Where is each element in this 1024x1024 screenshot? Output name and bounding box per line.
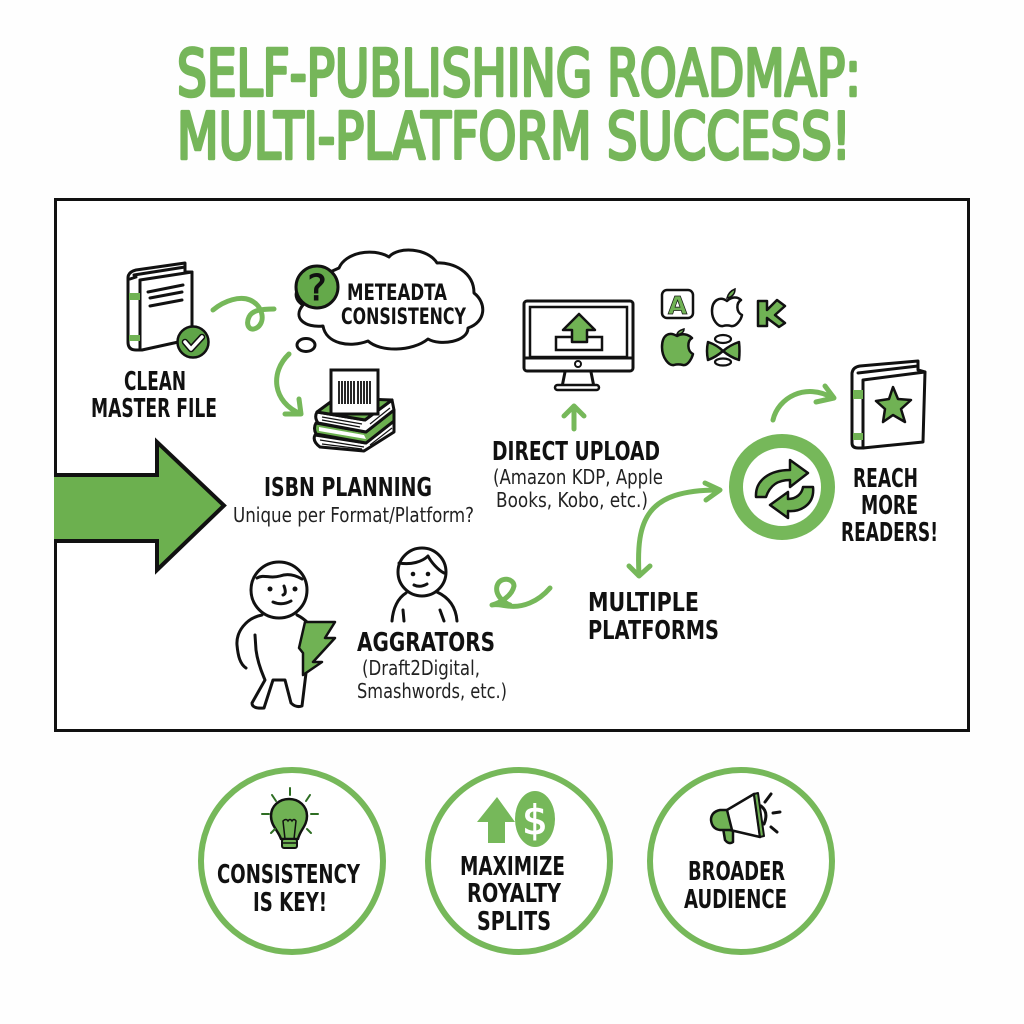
arrow: platforms to sync: [629, 483, 720, 576]
callout: maximize royalty splits: MAXIMIZE: [460, 852, 565, 882]
icon: ISBN books with barcode: [314, 370, 394, 451]
panel: roadmap frame: [56, 200, 968, 730]
callout: broader audience: BROADER: [688, 857, 785, 887]
callout: broader audience: AUDIENCE: [684, 885, 787, 915]
icon: kobo-style logo: [707, 335, 740, 366]
callout: consistency is key: [201, 770, 383, 952]
text: reach more readers: MORE: [861, 491, 918, 521]
text: ISBN planning: [233, 473, 474, 527]
text: aggregators: Smashwords, etc.): [357, 679, 507, 703]
callout: broader audience: [650, 770, 832, 952]
icon: star book: [852, 361, 925, 448]
arrow: curl to aggregators: [492, 579, 550, 606]
icon: apple outline: [712, 289, 742, 326]
icons: platform logos: [662, 289, 785, 366]
icon: apple solid: [662, 329, 693, 365]
text: ISBN planning: ISBN PLANNING: [264, 473, 432, 503]
text: reach more readers: [841, 464, 938, 548]
text: reach more readers: READERS!: [841, 518, 938, 548]
text: direct upload: DIRECT UPLOAD: [492, 437, 660, 467]
arrow: sync to readers: [773, 386, 834, 420]
callout: consistency is key: CONSISTENCY: [217, 860, 361, 890]
text: clean master file: CLEAN: [124, 367, 186, 397]
thought bubble: metadata consistency: METEADTA: [347, 281, 447, 306]
text: reach more readers: REACH: [853, 464, 918, 494]
callout: maximize royalty splits: [428, 770, 610, 952]
text: multiple platforms: MULTIPLE: [588, 588, 699, 618]
text: aggregators: [357, 628, 507, 703]
icon: monitor upload: [524, 301, 633, 390]
text: aggregators: AGGRATORS: [357, 628, 495, 658]
arrow: large green start arrow: [54, 442, 224, 570]
icon: megaphone: [711, 793, 780, 843]
thought bubble: metadata consistency: ?: [307, 268, 327, 309]
thought bubble: metadata consistency: [296, 250, 483, 352]
text: ISBN planning: Unique per Format/Platform?: [233, 503, 474, 527]
text: clean master file: MASTER FILE: [91, 394, 217, 424]
icon: K logo: [758, 300, 785, 327]
icon: lightbulb: [262, 788, 318, 848]
thought bubble: metadata consistency: CONSISTENCY: [341, 305, 467, 330]
icon: small person: [392, 548, 457, 621]
icon: arrow and dollar: $: [522, 798, 548, 844]
icon: arrow and dollar: [477, 791, 555, 847]
arrow: curl to metadata: [213, 298, 274, 329]
text: multiple platforms: PLATFORMS: [588, 616, 719, 646]
text: direct upload: Books, Kobo, etc.): [496, 488, 648, 512]
callout: maximize royalty splits: SPLITS: [477, 907, 551, 937]
text: direct upload: (Amazon KDP, Apple: [493, 465, 663, 489]
text: direct upload: [492, 437, 663, 512]
arrow: metadata to ISBN: [277, 354, 301, 414]
title: [177, 38, 861, 174]
arrow: up to monitor: [564, 406, 584, 429]
icon: large person with bolt: [237, 562, 335, 708]
text: clean master file: [91, 367, 217, 424]
icon: A badge: A: [668, 291, 688, 320]
text: multiple platforms: [588, 588, 719, 646]
icon: clean master file book: [128, 263, 208, 358]
text: aggregators: (Draft2Digital,: [362, 656, 480, 680]
callout: maximize royalty splits: ROYALTY: [467, 879, 562, 909]
callout: consistency is key: IS KEY!: [253, 888, 327, 918]
icon: sync ring: [736, 441, 828, 533]
